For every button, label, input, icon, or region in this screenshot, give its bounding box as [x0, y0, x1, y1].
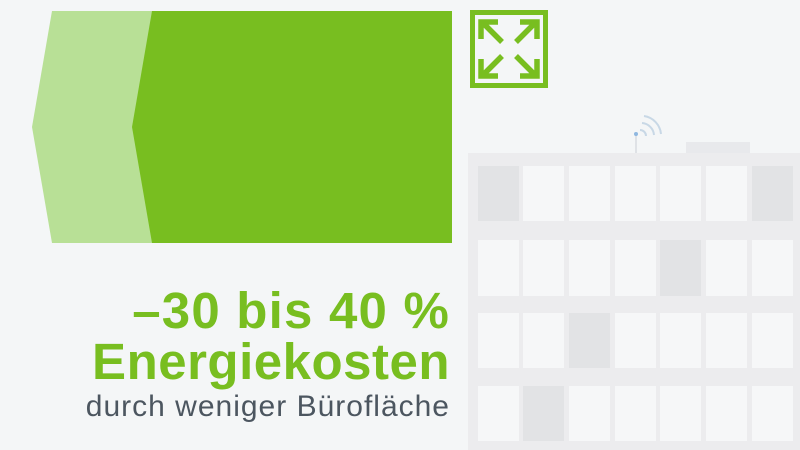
- subtitle: durch weniger Bürofläche: [86, 390, 450, 423]
- light chevron: [32, 11, 160, 243]
- building illustration: [468, 115, 800, 450]
- headline: percentage: –30 bis 40 %: [132, 282, 450, 339]
- icon: expand arrows: [470, 10, 548, 88]
- headline: Energiekosten: Energiekosten: [92, 333, 450, 390]
- hero shapes: [32, 11, 452, 243]
- dark chevron: [132, 11, 452, 243]
- antenna: [634, 116, 661, 153]
- roof box: [686, 142, 750, 154]
